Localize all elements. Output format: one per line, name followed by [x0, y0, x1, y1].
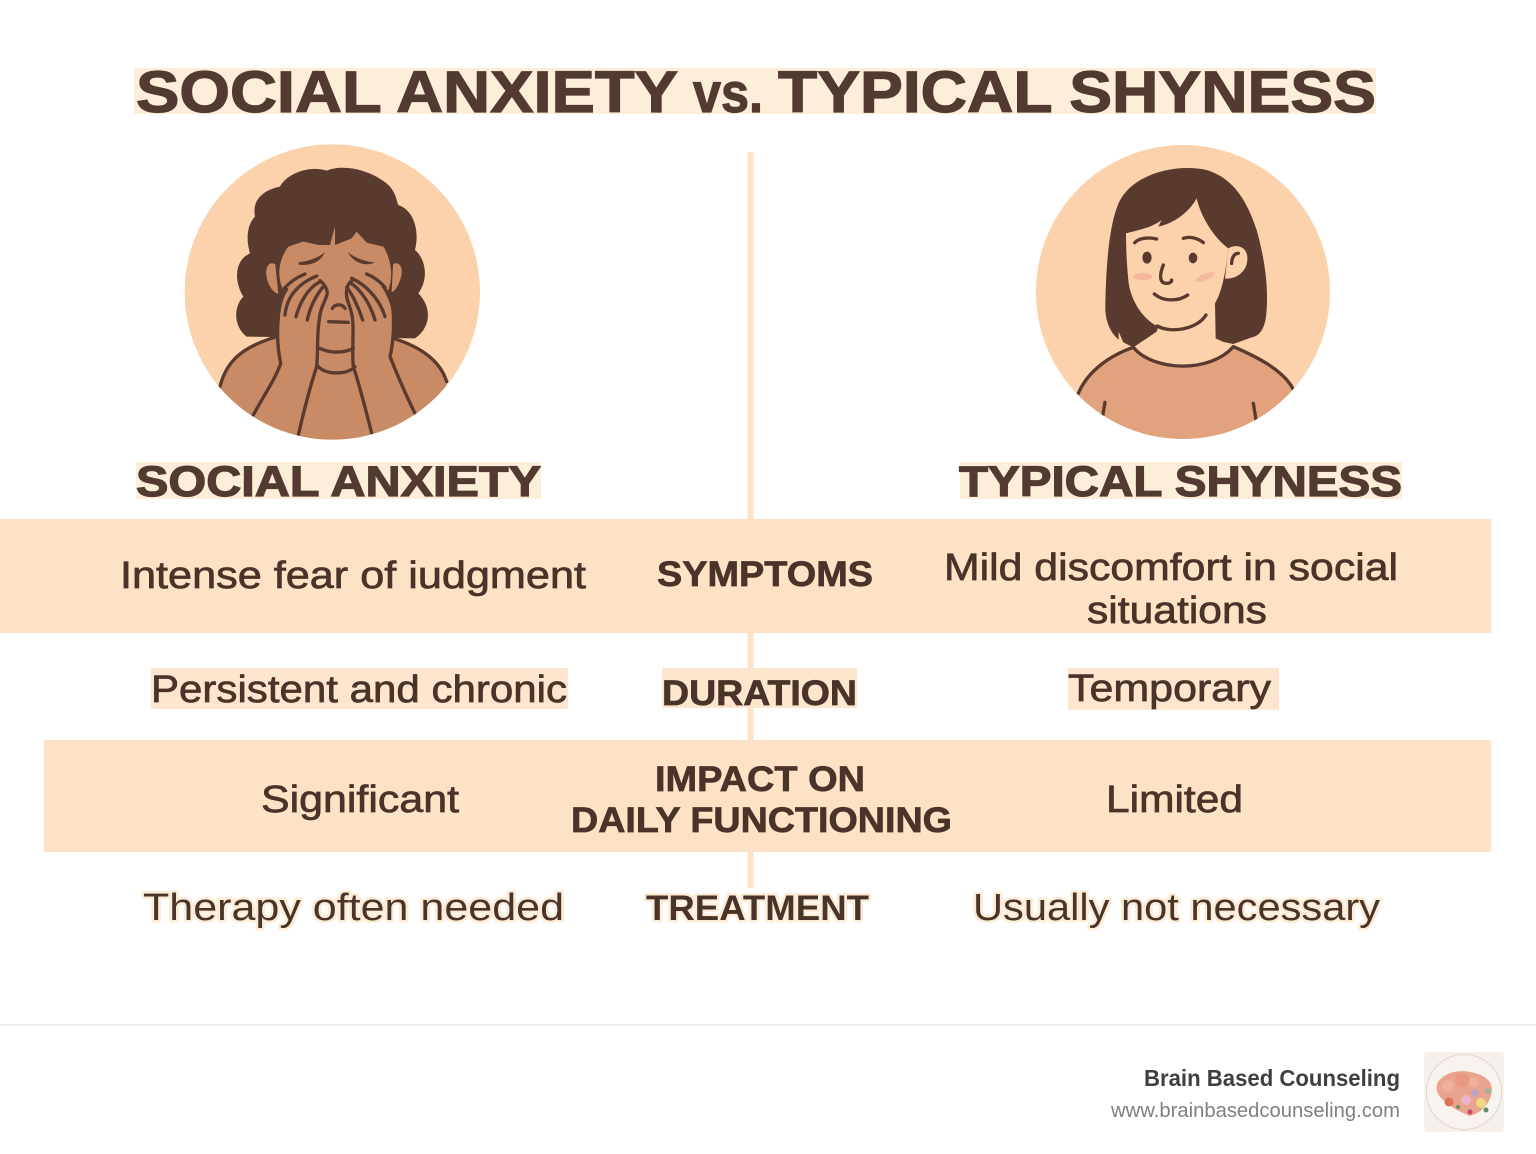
footer: brand text [1110, 1065, 1400, 1122]
icon: brain logo [1424, 1052, 1504, 1132]
title: TYPICAL SHYNESS [778, 60, 1376, 125]
heading: social anxiety: SOCIAL ANXIETY [136, 458, 541, 506]
vertical centre divider [748, 152, 754, 888]
row: impact on daily functioning: DAILY FUNCTIONING [571, 801, 952, 840]
row: duration: Persistent and chronic [151, 669, 567, 711]
row: duration: DURATION [662, 674, 857, 713]
row: symptoms: situations [1087, 590, 1267, 632]
title: SOCIAL ANXIETY [136, 60, 678, 125]
footer: brand text: www.brainbasedcounseling.com [1110, 1100, 1400, 1122]
heading: typical shyness: TYPICAL SHYNESS [959, 458, 1402, 506]
row: impact on daily functioning: Limited [1106, 779, 1243, 821]
row: treatment: TREATMENT [646, 889, 869, 928]
row: treatment: Usually not necessary [973, 887, 1380, 929]
footer rule [0, 1024, 1536, 1026]
icon: smiling shy person [1036, 145, 1330, 443]
row: impact on daily functioning: IMPACT ON [655, 760, 865, 799]
footer: brand text: Brain Based Counseling [1144, 1065, 1400, 1091]
title: vs. [693, 61, 763, 124]
row: duration [151, 668, 1279, 713]
row: symptoms: Mild discomfort in social [944, 547, 1398, 589]
row: symptoms [0, 519, 1491, 633]
icon: person with anxiety covering face [185, 144, 480, 443]
row: impact on daily functioning: Significant [261, 779, 459, 821]
row: symptoms: Intense fear of iudgment [120, 555, 586, 597]
row: treatment [143, 887, 1380, 929]
title [134, 60, 1376, 125]
row: symptoms: SYMPTOMS [657, 555, 873, 594]
row: impact on daily functioning [44, 740, 1491, 852]
row: duration: Temporary [1068, 668, 1271, 710]
row: treatment: Therapy often needed [143, 887, 564, 929]
